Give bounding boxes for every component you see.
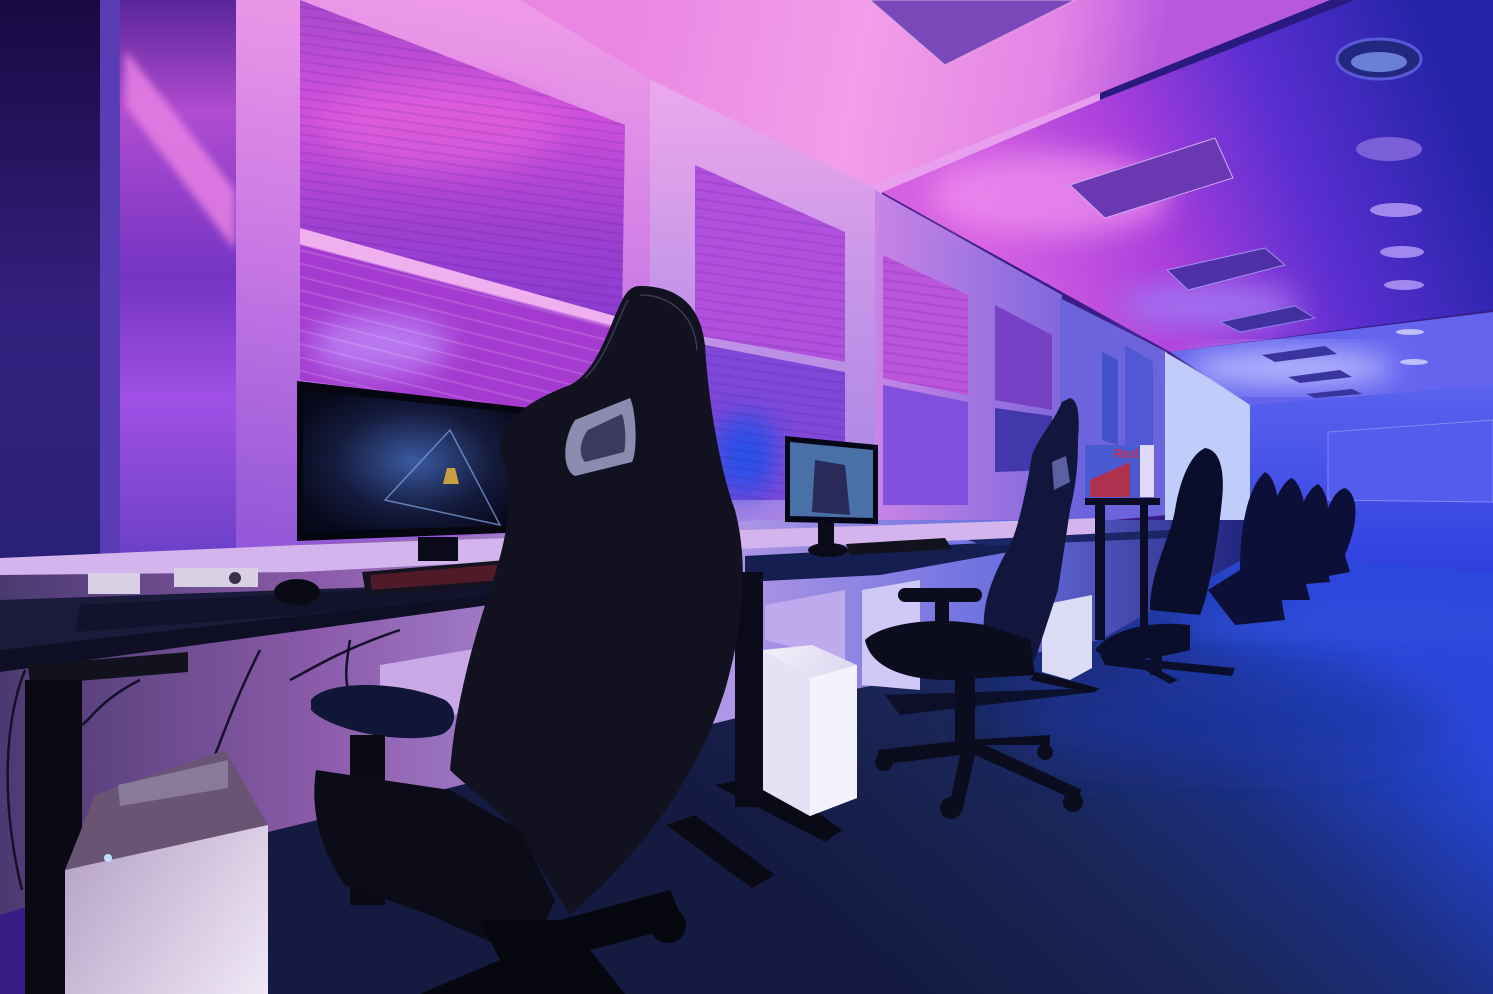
desk 1 (0, 582, 525, 994)
chair headrest opening (565, 398, 636, 476)
window sill (0, 518, 1100, 575)
large window (300, 0, 625, 410)
ceiling left section (520, 0, 1350, 190)
second window (695, 165, 845, 500)
white PC left (65, 750, 268, 994)
radiators (380, 580, 920, 715)
back wall (1165, 352, 1493, 572)
keyboard 2 (808, 538, 952, 557)
lower wall (0, 520, 1250, 915)
chair armrest (311, 685, 454, 738)
ceiling vents (870, 0, 1362, 398)
white PC right (1042, 595, 1092, 680)
far desks (968, 445, 1170, 640)
fourth window (995, 305, 1052, 472)
chair base (420, 890, 685, 994)
third window (883, 255, 968, 505)
window frames (236, 0, 1255, 552)
gaming chair 2 (865, 398, 1100, 819)
white PC centre (763, 645, 857, 816)
ceiling right section (878, 0, 1493, 405)
main gaming chair (311, 286, 743, 994)
row of far chairs (1208, 472, 1356, 625)
far desks: Red (1114, 446, 1139, 461)
lit wall column (120, 0, 238, 556)
floor (260, 555, 1493, 994)
left dark wall (0, 0, 122, 560)
monitor 1 (297, 381, 530, 561)
desk 2 (666, 541, 1020, 888)
cables (8, 630, 400, 890)
power sockets (88, 568, 258, 594)
gaming chair 3 (1095, 448, 1235, 684)
monitor 2 (785, 436, 878, 544)
far windows (1102, 345, 1234, 465)
keyboard and mouse (274, 558, 532, 605)
ceiling lights (1337, 39, 1428, 365)
ceiling beam (870, 0, 1355, 193)
